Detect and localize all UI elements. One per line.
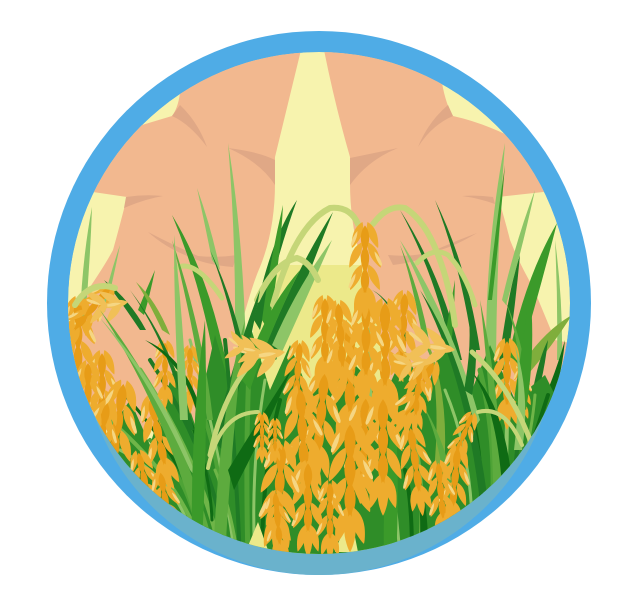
arched stems: [75, 207, 475, 325]
back grass blades left: [81, 144, 333, 375]
back grass blades right: [372, 143, 572, 440]
rice heads on front stems: [224, 322, 478, 526]
far left and far right rice panicles: [48, 274, 533, 552]
left and right front stems: [208, 352, 532, 468]
right hand creases: [350, 105, 495, 265]
bottom yellow gaps: [248, 522, 358, 552]
leaf fan stripes: [110, 340, 548, 560]
pale patch behind stems: [240, 265, 400, 560]
teal tint on lower ring: [81, 99, 557, 575]
left hand creases: [124, 105, 275, 267]
green base mass: [106, 332, 554, 554]
left hand: [60, 50, 301, 430]
circular scene: [48, 50, 580, 570]
pale yellow background: [68, 52, 570, 554]
central rice panicles: [258, 222, 440, 554]
mid grass blades: [100, 235, 532, 560]
right hand: [324, 50, 580, 420]
blue ring: [47, 31, 591, 575]
illustration: rice plants in front of cupped hands inside a blue ring: [47, 31, 591, 575]
